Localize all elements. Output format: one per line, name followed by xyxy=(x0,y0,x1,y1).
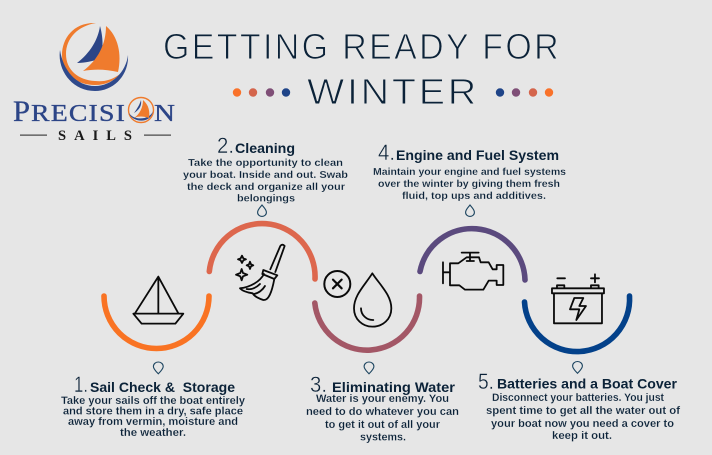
title dots left xyxy=(233,88,290,97)
step 2 text: your boat. Inside and out. Swab xyxy=(183,170,348,181)
pin 5 xyxy=(573,362,582,373)
arc 1 orange xyxy=(104,296,209,348)
title: GETTING READY FOR xyxy=(163,26,561,67)
step 5 text xyxy=(478,369,680,442)
step 1 text: away from vermin, moisture and xyxy=(68,416,238,428)
logo wordmark xyxy=(13,95,175,144)
logo wordmark: SAILS xyxy=(58,128,132,144)
step 2 text: 2. xyxy=(217,133,234,158)
step 3 text: systems. xyxy=(360,432,406,444)
step 3 text: 3. xyxy=(310,372,327,397)
step 1 text: 1. xyxy=(74,372,88,397)
pin 3 xyxy=(364,362,374,374)
step 4 text: Maintain your engine and fuel systems xyxy=(373,167,566,178)
step 5 text: keep it out. xyxy=(552,430,612,442)
logo: Precision Sails xyxy=(13,23,175,144)
arc 4 purple xyxy=(420,229,525,280)
step 3 text: to get it out of all your xyxy=(325,419,441,431)
step 1 text: Take your sails off the boat entirely xyxy=(61,395,246,407)
arc 5 blue xyxy=(524,296,630,352)
step 3 text: Water is your enemy. You xyxy=(316,393,449,405)
logo wordmark: RECISI xyxy=(31,101,126,127)
step 3 text: Eliminating Water xyxy=(332,379,456,395)
arc 2 coral xyxy=(209,224,315,279)
step 5 text: spent time to get all the water out of xyxy=(486,405,680,417)
step 4 text xyxy=(373,140,566,202)
step 1 text xyxy=(61,372,246,439)
arc 3 mauve xyxy=(315,296,420,350)
title: WINTER xyxy=(307,71,479,112)
step 4 text: Engine and Fuel System xyxy=(396,147,559,163)
step 3 text xyxy=(306,372,459,444)
step 1 text: the weather. xyxy=(120,427,186,439)
step 2 text: Take the opportunity to clean xyxy=(188,158,343,169)
step 1 text: Sail Check & Storage xyxy=(90,379,235,395)
title dots right xyxy=(496,88,553,97)
step 2 text: Cleaning xyxy=(235,140,295,156)
logo emblem xyxy=(60,23,128,91)
pin 1 xyxy=(153,362,163,374)
title xyxy=(163,26,561,112)
logo wordmark: P xyxy=(13,95,30,128)
step 5 text: Disconnect your batteries. You just xyxy=(492,392,664,404)
icon: sailboat xyxy=(133,277,183,324)
step 2 text: the deck and organize all your xyxy=(187,182,345,193)
logo wordmark: N xyxy=(154,101,175,127)
icon: broom with sparkles xyxy=(236,245,285,300)
pin 2 xyxy=(258,205,266,216)
icon: water drop xyxy=(354,273,391,327)
step 5 text: Batteries and a Boat Cover xyxy=(497,376,678,392)
step 3 text: need to do whatever you can xyxy=(306,406,459,418)
step 5 text: your boat now you need a cover to xyxy=(491,418,674,430)
step 5 text: 5. xyxy=(478,369,494,394)
step 2 text: belongings xyxy=(237,194,295,204)
icon: engine xyxy=(443,253,503,290)
icon: battery xyxy=(552,274,604,323)
step 4 text: over the winter by giving them fresh xyxy=(378,179,560,190)
step 4 text: fluid, top ups and additives. xyxy=(402,191,546,202)
step 2 text xyxy=(183,133,348,204)
step 4 text: 4. xyxy=(378,140,395,165)
pin 4 xyxy=(466,205,474,216)
step 1 text: and store them in a dry, safe place xyxy=(63,406,243,418)
icon: no water x circle xyxy=(324,271,350,297)
